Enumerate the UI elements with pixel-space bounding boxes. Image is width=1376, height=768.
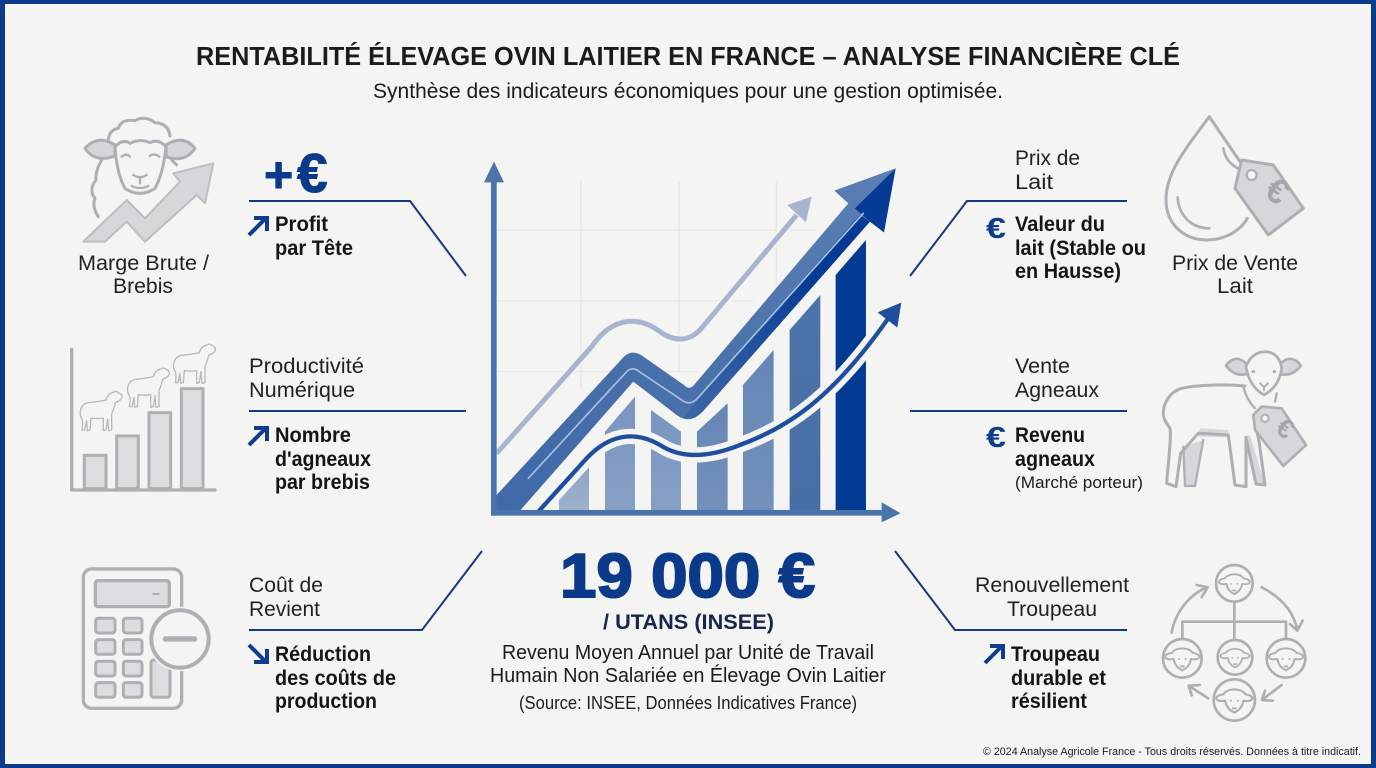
text: valeur du lait: lait (Stable ou: [1015, 237, 1146, 260]
text: réduction des coûts: des coûts de: [275, 667, 396, 690]
heading: prix de lait: Lait: [1015, 171, 1053, 194]
label: marge brute: [78, 252, 209, 298]
heading: coût de revient: [249, 574, 323, 621]
arrow: up: [985, 646, 1003, 663]
connector: cost: [249, 551, 482, 630]
arrow: up: [249, 428, 267, 445]
euro icon: €: [986, 213, 1006, 245]
icon: bars with lambs: [72, 344, 215, 490]
connector: lambs: [910, 410, 1127, 412]
text: troupeau durable: Troupeau: [1011, 643, 1100, 666]
main arrow: [492, 168, 896, 511]
text: troupeau durable: [1011, 643, 1106, 713]
icon: milk drop with tag: [1166, 117, 1303, 240]
label: prix de vente: Lait: [1217, 275, 1253, 298]
text: revenu agneaux: agneaux: [1015, 448, 1095, 471]
arrow: down: [249, 645, 267, 662]
heading: renouvellement troupeau: Renouvellement: [975, 574, 1129, 597]
connector: flock: [895, 551, 1127, 630]
curve with halo: [538, 303, 901, 512]
label: marge brute: Marge Brute /: [78, 252, 209, 275]
arrow: up: [249, 218, 267, 235]
text: valeur du lait: [1015, 213, 1146, 283]
icon: flock renewal cycle: [1163, 565, 1305, 721]
footer: © 2024 Analyse Agricole France - Tous droits réservés. Données à titre indicatif.: [983, 746, 1361, 758]
light trend arrow: [497, 197, 812, 453]
text: revenu agneaux: [1015, 424, 1143, 492]
icon: lamb with price tag: [1163, 352, 1306, 487]
icon: milk drop with tag: €: [1258, 170, 1296, 213]
heading: prix de lait: Prix de: [1015, 147, 1080, 170]
connector: productivity: [249, 410, 466, 412]
text: profit par tête: [275, 213, 353, 260]
description: [490, 642, 886, 687]
text: nombre d'agneaux: [275, 424, 371, 494]
text: réduction des coûts: [275, 643, 396, 713]
label: marge brute: Brebis: [113, 275, 173, 298]
connector: milk: [910, 201, 1127, 276]
euro icon: €: [986, 422, 1006, 454]
heading: vente agneaux: Vente: [1015, 355, 1070, 378]
connector: profit: [249, 201, 466, 276]
big symbol: plus euro: €: [297, 142, 328, 204]
axes: [484, 162, 901, 522]
text: réduction des coûts: production: [275, 690, 377, 713]
heading: prix de lait: [1015, 147, 1080, 194]
icon: sheep with rising arrow: [83, 118, 213, 242]
heading: vente agneaux: [1015, 355, 1100, 402]
bars: [559, 240, 866, 510]
key figure: 19 000 €: 19 000 €: [560, 542, 815, 611]
text: revenu agneaux: (Marché porteur): [1015, 473, 1143, 492]
text: profit par tête: Profit: [275, 213, 328, 236]
text: nombre d'agneaux: par brebis: [275, 471, 370, 494]
unit: UTANS: / UTANS (INSEE): [603, 611, 774, 634]
text: nombre d'agneaux: Nombre: [275, 424, 351, 447]
text: valeur du lait: Valeur du: [1015, 213, 1105, 236]
description: Humain Non Salariée en Élevage Ovin Laitier: [490, 664, 886, 687]
text: troupeau durable: durable et: [1011, 667, 1106, 690]
heading: productivité numérique: [249, 355, 364, 402]
heading: renouvellement troupeau: [975, 574, 1129, 621]
heading: productivité numérique: Productivité: [249, 355, 364, 378]
source: (Source: INSEE, Données Indicatives France): [519, 693, 857, 713]
text: réduction des coûts: Réduction: [275, 643, 371, 666]
icon: lamb with price tag: €: [1271, 412, 1300, 445]
heading: vente agneaux: Agneaux: [1015, 379, 1100, 402]
heading: productivité numérique: Numérique: [249, 379, 355, 402]
text: profit par tête: par Tête: [275, 237, 353, 260]
label: prix de vente: Prix de Vente: [1172, 252, 1298, 275]
title: RENTABILITÉ ÉLEVAGE OVIN LAITIER EN FRANCE – ANALYSE FINANCIÈRE CLÉ: [196, 41, 1180, 71]
heading: renouvellement troupeau: Troupeau: [1007, 598, 1097, 621]
heading: coût de revient: Revient: [249, 598, 320, 621]
text: nombre d'agneaux: d'agneaux: [275, 448, 371, 471]
text: revenu agneaux: Revenu: [1015, 424, 1085, 447]
text: valeur du lait: en Hausse): [1015, 260, 1121, 283]
label: prix de vente: [1172, 252, 1298, 298]
icon: calculator with minus: [83, 569, 212, 708]
subtitle: Synthèse des indicateurs économiques pour une gestion optimisée.: [373, 80, 1003, 103]
chart: central growth chart: [484, 162, 901, 522]
big symbol: plus euro: +: [264, 147, 293, 203]
description: Revenu Moyen Annuel par Unité de Travail: [502, 642, 874, 664]
heading: coût de revient: Coût de: [249, 574, 323, 597]
text: troupeau durable: résilient: [1011, 690, 1087, 713]
